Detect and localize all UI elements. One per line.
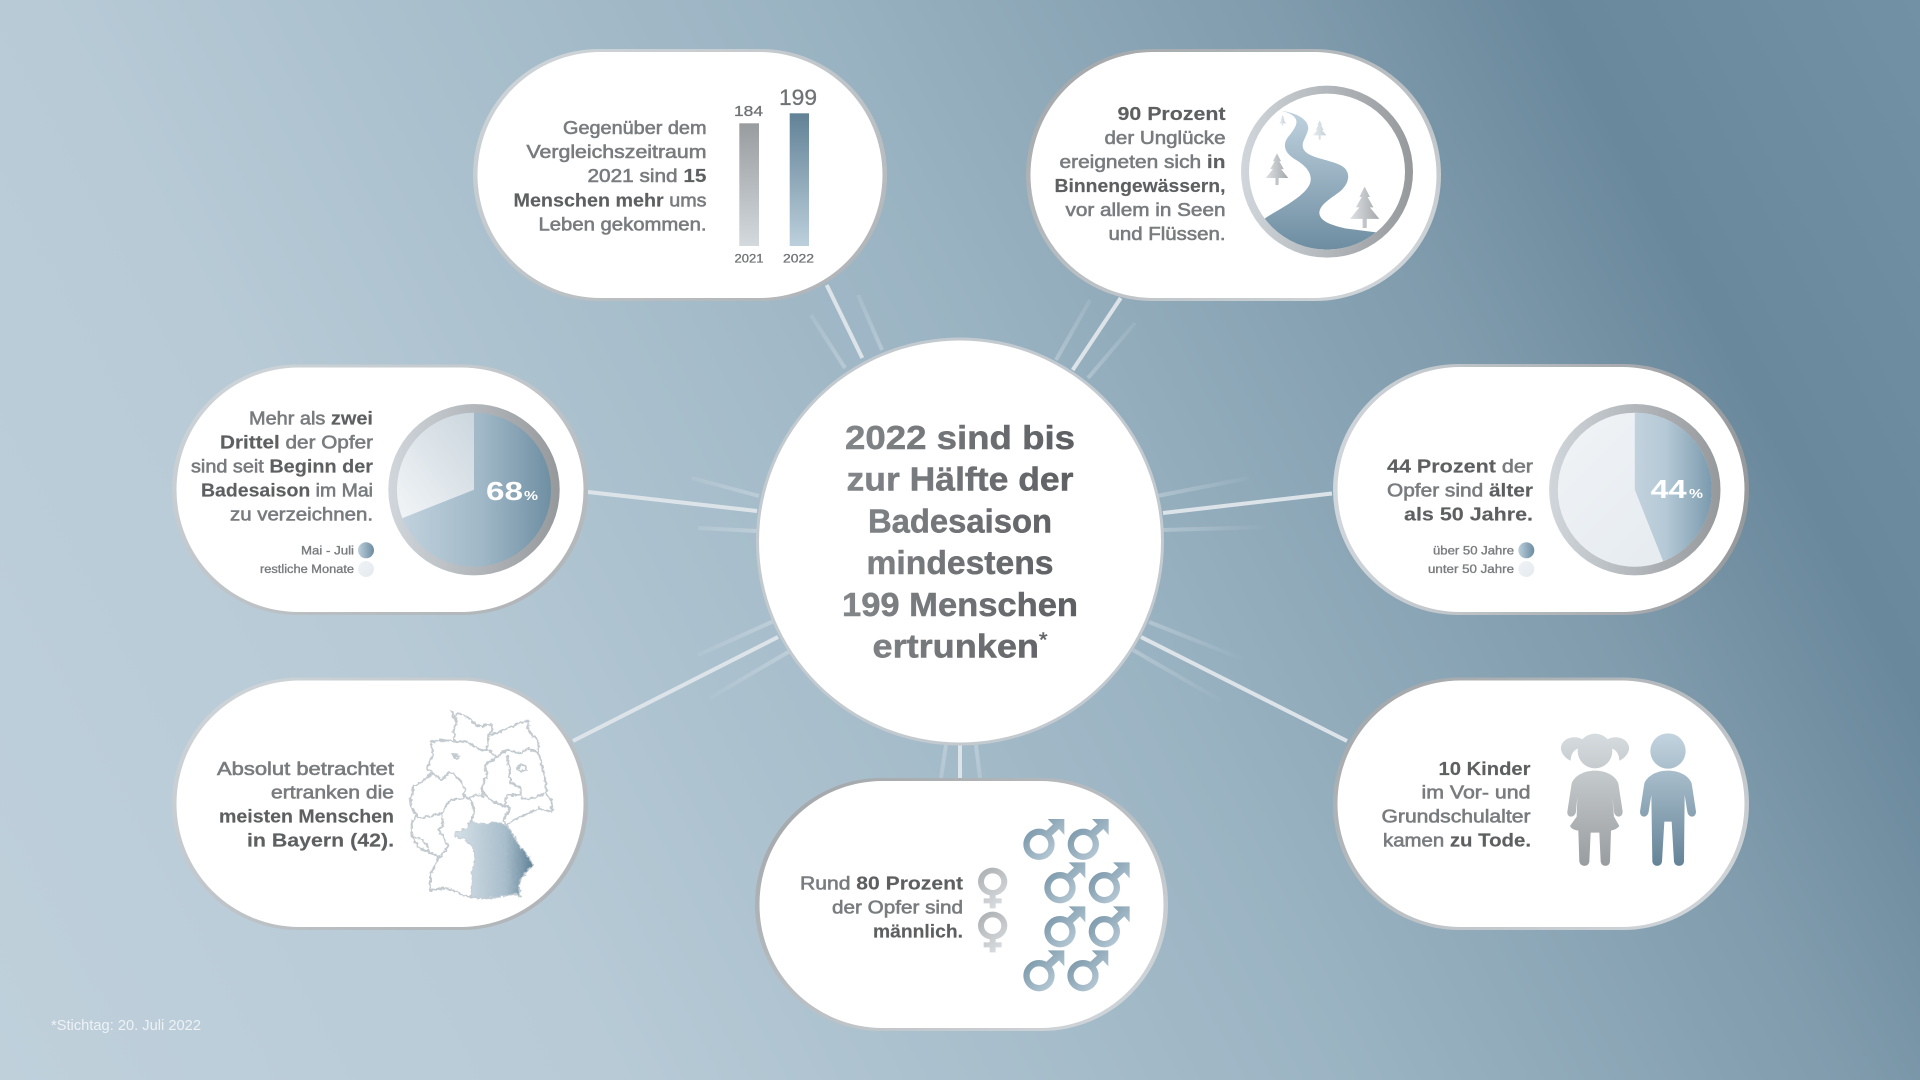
panel: children (1333, 678, 1749, 930)
footnote: *Stichtag: 20. Juli 2022 (51, 1018, 201, 1034)
heading: Badesaison (868, 502, 1052, 539)
heading (842, 419, 1078, 664)
icons: gender symbols (978, 819, 1130, 991)
legend: age: über 50 Jahre (1433, 546, 1514, 558)
text: Bayern (217, 758, 395, 850)
text: 90 Prozent: Binnengewässern, (1054, 175, 1226, 196)
icon: river landscape (1241, 86, 1413, 258)
text: zwei Drittel: zu verzeichnen. (230, 504, 373, 525)
text: 44 Prozent: 44 Prozent der (1387, 456, 1533, 476)
text: Vergleichszeitraum: Vergleichszeitraum (526, 141, 706, 162)
panel: age 44 percent (1333, 364, 1749, 615)
pie chart 44 percent (1549, 404, 1721, 575)
text: 10 Kinder: im Vor- und (1422, 782, 1530, 803)
text: 10 Kinder: Grundschulalter (1382, 806, 1530, 827)
text: 44 Prozent: Opfer sind älter (1387, 480, 1533, 501)
bar chart: 184 (734, 103, 763, 120)
panel: Saisonbeginn 68 Prozent (172, 364, 588, 615)
legend: age: unter 50 Jahre (1428, 564, 1514, 576)
state: Bayern highlighted (455, 822, 533, 898)
text: zwei Drittel: Mehr als zwei (249, 408, 373, 429)
text: 10 Kinder: kamen zu Tode. (1383, 829, 1531, 850)
text: 44 Prozent (1387, 456, 1533, 525)
panel: gender (755, 778, 1168, 1031)
text: Vergleichszeitraum (514, 117, 706, 234)
pie chart 44 percent: % (1689, 487, 1703, 501)
pie chart 68 percent: 68 (486, 476, 523, 506)
pie chart 68 percent (388, 404, 560, 575)
text: 90 Prozent (1054, 103, 1226, 244)
legend: months: Mai - Juli (301, 546, 354, 558)
panel: Bayern map (172, 678, 588, 930)
pie chart 44 percent: 44 (1651, 474, 1687, 504)
bar chart: 2022 (783, 254, 814, 266)
central circle (756, 338, 1164, 746)
text: 90 Prozent: ereigneten sich in (1060, 151, 1226, 172)
text: 80 Prozent (800, 872, 963, 942)
heading: 2022 sind bis (845, 419, 1075, 456)
text: 10 Kinder (1382, 758, 1531, 850)
text: Bayern: Absolut betrachtet (217, 758, 395, 779)
heading: 199 Menschen (842, 586, 1078, 623)
connector rays (573, 285, 1347, 778)
heading: ertrunken (872, 628, 1025, 664)
text: zwei Drittel (191, 408, 373, 525)
heading: zur Hälfte der (846, 461, 1074, 498)
text: 44 Prozent: als 50 Jahre. (1404, 504, 1533, 525)
text: Bayern: in Bayern (42). (247, 829, 394, 850)
panel: Binnengewässer (1026, 49, 1441, 301)
text: zwei Drittel: Badesaison im Mai (201, 480, 373, 501)
text: Vergleichszeitraum: Gegenüber dem (563, 117, 706, 138)
text: 80 Prozent: männlich. (873, 921, 963, 942)
map of Germany (410, 712, 552, 898)
heading: * (1039, 630, 1048, 652)
text: Vergleichszeitraum: 2021 sind 15 (588, 165, 706, 186)
text: 90 Prozent: und Flüssen. (1108, 223, 1226, 244)
legend: months: restliche Monate (260, 564, 354, 576)
text: 90 Prozent: vor allem in Seen (1066, 199, 1226, 220)
text: Bayern: ertranken die (271, 782, 394, 803)
legend: age (1428, 542, 1534, 577)
text: 10 Kinder: 10 Kinder (1438, 758, 1530, 779)
pie chart 68 percent: % (524, 489, 538, 503)
heading: mindestens (866, 544, 1054, 581)
legend: months (260, 542, 374, 577)
text: 90 Prozent: 90 Prozent (1118, 103, 1226, 124)
text: zwei Drittel: Drittel der Opfer (220, 432, 373, 453)
text: 90 Prozent: der Unglücke (1104, 127, 1226, 148)
text: Bayern: meisten Menschen (219, 806, 394, 827)
text: 80 Prozent: der Opfer sind (832, 897, 963, 918)
text: Vergleichszeitraum: Menschen mehr ums (514, 190, 706, 210)
panel: bar chart comparison (473, 49, 887, 301)
text: Vergleichszeitraum: Leben gekommen. (538, 214, 706, 234)
bar chart: 2021 (734, 254, 764, 266)
bar chart: 199 (779, 85, 817, 110)
icon: girl and boy (1561, 733, 1696, 866)
text: zwei Drittel: sind seit Beginn der (191, 456, 373, 476)
bar chart (734, 85, 817, 266)
text: 80 Prozent: Rund 80 Prozent (800, 872, 963, 893)
